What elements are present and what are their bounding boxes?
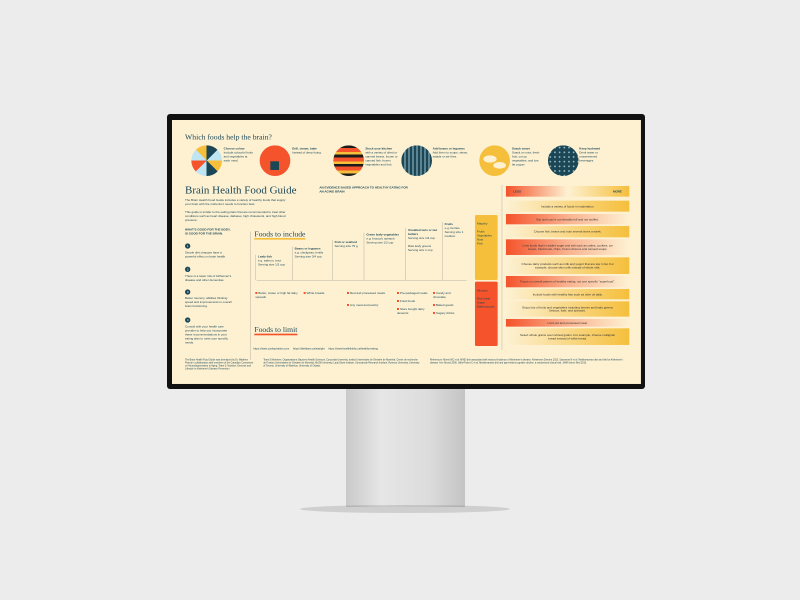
recommendation rows	[506, 200, 630, 345]
recommendation rows: Limit red and processed meat.	[547, 321, 588, 324]
recommendation rows: Enjoy lots of fruits and vegetables including berries and leafy greens (lettuce, kale, and spinach).	[522, 306, 613, 312]
tip text: choose colour: Include colourful fruits and vegetables at each meal.	[224, 151, 253, 162]
horizontal line	[257, 279, 467, 282]
include columns: Serving size 75 g	[335, 244, 358, 248]
icon: grill	[260, 145, 290, 176]
vertical line left	[249, 232, 252, 360]
intro text: The Brain Health Food Guide includes a variety of healthy foods that supply your brain with the nutrients it needs to function best.	[185, 198, 285, 206]
limit items: White breads	[307, 291, 324, 295]
limit items: Butter, cream or high fat dairy spreads	[255, 291, 298, 299]
links: https://www.cookspiration.com https://dietitians.ca/eatright https://www.healthlinkbc.ca/healthy-eating	[253, 347, 378, 350]
tip text: beans: Add beans or legumes	[433, 147, 465, 150]
numbered list: 2	[187, 268, 188, 271]
recommendation rows: Focus on overall pattern of healthy eating, not one specific "superfood".	[520, 280, 615, 283]
subtitle: AN EVIDENCE BASED APPROACH TO HEALTHY EATING FOR AN AGING BRAIN	[319, 186, 408, 193]
panel: majority: Vegetables	[477, 234, 492, 237]
divider	[501, 185, 503, 350]
tip text: hydrated: Keep hydrated	[579, 147, 600, 150]
include columns: e.g. chickpeas, lentils	[295, 251, 323, 254]
include columns: Unsalted nuts or nut butters	[408, 228, 437, 236]
monitor stand	[346, 389, 465, 507]
limit items: Red and processed meats	[350, 291, 385, 295]
panel: majority: Fruits	[477, 230, 484, 233]
recommendation rows: Limit foods high in added sugar and salt such as cakes, cookies, ice cream, fried foods, chips, frozen dinners and canned soups.	[523, 244, 613, 250]
include columns: e.g. berries	[445, 226, 460, 230]
tip text: grill: Grill, steam, bake	[292, 147, 317, 150]
panel: majority: Majority	[477, 222, 487, 225]
limit items: Store bought dairy desserts	[397, 307, 424, 315]
include columns: Fish or seafood	[335, 240, 357, 244]
include columns: Raw leafy greens	[408, 244, 431, 248]
recommendation rows: Eat until you're comfortably full and not stuffed.	[537, 217, 599, 221]
tip text: grill: Instead of deep frying.	[292, 151, 322, 154]
include columns	[255, 222, 464, 280]
heading: Brain Health Food Guide: Brain Health Food Guide	[185, 184, 296, 196]
tip text: snack: Snack on nuts, fresh fruit, cut up vegetables, and low fat yogurt	[512, 151, 539, 166]
recommendation rows: Include foods with healthy fats such as olive oil daily.	[533, 292, 603, 296]
include columns: Beans or legumes	[295, 247, 320, 250]
numbered list: There is a lower risk of Alzheimer's disease and other dementias.	[185, 274, 231, 282]
include columns: Serving size 1/2 cup	[258, 263, 285, 266]
limit items	[255, 291, 454, 315]
tip text: kitchen: with a variety of dried or canned beans, frozen or canned fish, frozen vegetables and fruit	[365, 151, 398, 166]
include columns: Fruits	[445, 222, 453, 226]
include columns: Green leafy vegetables	[366, 233, 399, 236]
panel: minority: Minority	[477, 289, 487, 292]
monitor bezel	[167, 114, 645, 389]
tip text: beans: Add them to soups, stews, salads or stir fries.	[433, 151, 468, 158]
recommendation rows: Choose dairy products such as milk and yogurt that are low in fat. For example, choose skim milk instead of whole milk.	[522, 262, 614, 269]
footer text: The Brain Health Food Guide was developed by Dr. Matthew Parrott in collaboration with members of the Canadian Consortium on Neurodegeneration in Aging, Team 5: Nutrition, Exercise and Lifestyle in Alzheimer's Disease Prevention	[185, 359, 253, 370]
footer text: Team 5 Members, Organizations: Baycrest Health Sciences, Concordia University, Institut Universitaire de Gériatrie de Montréal, Centre de recherche de l'Institut Universitaire de Gériatrie de Montréal, McGill University, Lady Davis Institute, Sunnybrook Research Institute, Ryerson University, University of Toronto, University of Waterloo, University of Ottawa.	[263, 359, 419, 367]
heading: what's good: IS GOOD FOR THE BRAIN.	[185, 232, 223, 235]
footer text: References: Morris MC et al. MIND diet associated with reduced incidence of Alzheimer's disease. Alzheimers Dement 2015. Scarmeas N et al. Mediterranean diet and risk for Alzheimer's disease. Ann Neurol 2006. Valls-Pedret C et al. Mediterranean diet and age-related cognitive decline: a randomized clinical trial. JAMA Intern Med 2015.	[430, 359, 623, 364]
panel: majority: Fish	[477, 242, 483, 245]
numbered list: 4	[187, 318, 188, 322]
tip text: kitchen: Stock your kitchen	[365, 147, 392, 150]
heading: foods to limit: Foods to limit	[254, 325, 297, 334]
tip text: snack: Snack smart	[512, 147, 530, 150]
numbered list: 1	[187, 244, 188, 248]
intro text: This guide is similar to the eating plans that are recommended to treat other conditions such as heart disease, diabetes, high cholesterol, and high blood pressure.	[185, 210, 286, 222]
panel: minority	[475, 282, 498, 346]
tip text: hydrated	[579, 147, 600, 162]
footer text	[185, 358, 623, 370]
limit items: Any meat and poultry	[350, 303, 378, 307]
numbered list: 3	[187, 290, 188, 294]
tip text: grill	[292, 147, 322, 154]
panel: majority: Nuts	[477, 238, 483, 241]
include columns: e.g. salmon, trout	[258, 259, 281, 262]
panel: minority: Red meat	[477, 297, 490, 300]
include columns: Serving size 1/2 cup	[366, 241, 393, 244]
panel: majority	[475, 215, 498, 280]
panel: minority: Baked goods	[477, 305, 494, 308]
icon: snack	[479, 145, 510, 176]
include columns: Serving size 1 medium	[445, 230, 463, 238]
numbered list: Better memory, abilities thinking speed and improvements in overall brain functioning.	[185, 296, 232, 308]
tip text: hydrated: Drink water or unsweetened beverages.	[579, 151, 598, 162]
numbered list: Simple diet changes have a powerful effect on brain health.	[185, 251, 226, 258]
recommendation rows: Choose fish, beans and nuts several times a week.	[534, 230, 601, 233]
numbered list: Consult with your health care provider to help you incorporate these recommendations in your eating plan to meet your specific needs.	[185, 325, 228, 344]
screen	[172, 120, 641, 384]
tip text: choose colour: Choose colour	[224, 147, 245, 150]
intro text	[185, 198, 286, 222]
numbered list	[185, 243, 232, 344]
include columns: e.g. broccoli, spinach	[366, 237, 394, 240]
include columns: Serving size 3/4 cup	[295, 255, 322, 258]
heading: what's good	[185, 228, 230, 235]
legend bar less/more: LESS	[513, 190, 521, 193]
icon: kitchen shelves	[333, 145, 364, 176]
icon: water drops	[548, 145, 579, 176]
legend bar less/more	[506, 186, 629, 197]
limit items: Fried foods	[400, 299, 415, 303]
include columns: Serving size 1/4 cup	[408, 236, 435, 240]
include columns: Serving size 1 cup	[408, 248, 432, 252]
limit items: Candy and chocolate	[433, 291, 450, 299]
stand shadow	[300, 505, 510, 513]
icon: colour pie	[191, 145, 222, 176]
limit items: Baked goods	[436, 303, 453, 307]
title: which foods: Which foods help the brain?	[185, 133, 272, 141]
panel: minority: Sugar	[477, 301, 485, 304]
legend bar less/more: MORE	[613, 190, 622, 193]
heading: foods to include: Foods to include	[254, 230, 305, 238]
tip text: beans	[432, 147, 468, 158]
heading: what's good: WHAT'S GOOD FOR THE BODY,	[185, 228, 230, 231]
limit items: Sugary drinks	[436, 311, 454, 315]
limit items: Pre-packaged meals	[400, 291, 427, 295]
include columns: Leafy fish	[258, 255, 272, 258]
recommendation rows: Select whole grains over refined grains. For example, choose multigrain bread instead of white bread.	[520, 333, 615, 340]
recommendation rows: Include a variety of foods in moderation.	[541, 204, 594, 208]
icon: beans	[401, 145, 432, 176]
